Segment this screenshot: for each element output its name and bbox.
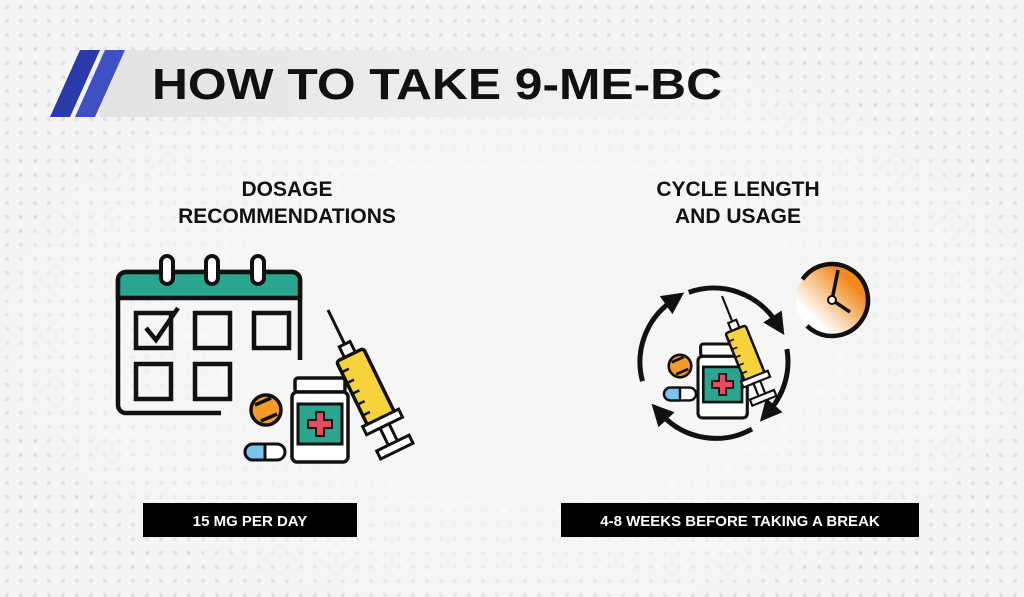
icon: cycle with clock (640, 250, 882, 438)
heading: dosage: RECOMMENDATIONS (178, 205, 396, 228)
heading: dosage: DOSAGE (241, 178, 333, 201)
title: HOW TO TAKE 9-ME-BC (152, 60, 722, 109)
title banner (50, 50, 740, 117)
heading: cycle: CYCLE LENGTH (656, 178, 820, 201)
heading: cycle (656, 178, 820, 228)
label: cycle (561, 503, 919, 537)
label: dosage: 15 MG PER DAY (193, 513, 307, 530)
heading: cycle: AND USAGE (675, 205, 801, 228)
icon: calendar with meds (118, 256, 415, 462)
label: dosage (143, 503, 357, 537)
label: cycle: 4-8 WEEKS BEFORE TAKING A BREAK (600, 513, 880, 530)
blue stripes (50, 50, 125, 117)
heading: dosage (178, 178, 396, 228)
